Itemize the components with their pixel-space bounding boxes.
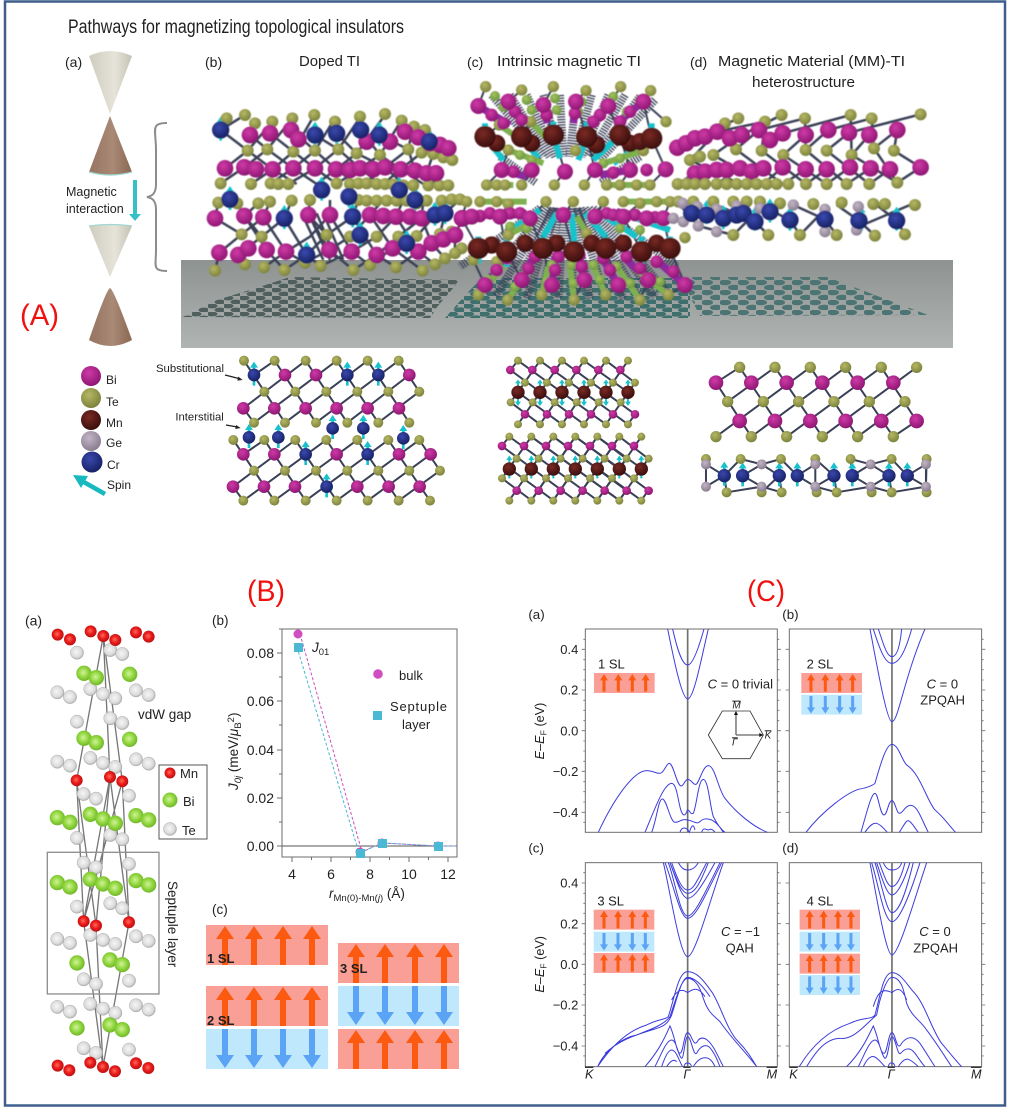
panel B(c): layer stacks: 3 SL [340,961,368,976]
panel C(c): band structure 3 SL: −0.2 [553,998,578,1013]
legend: Mn Bi Te [159,765,207,839]
panel C(d): band structure 4 SL: ZPQAH [913,940,958,955]
crystal: MM-TI heterostructure [668,108,929,242]
panel C(c): band structure 3 SL: 0.2 [560,916,578,931]
panel A(a): Dirac cones: interaction [66,202,124,216]
panel C(d): band structure 4 SL: Γ [888,1068,896,1082]
panel C(a): band structure 1 SL: C = 0 trivial [708,677,773,692]
text: vdW gap: vdW gap [138,707,191,722]
column headings: (c) [467,54,483,70]
panel C(a): band structure 1 SL: Γ [732,737,739,748]
panel B(c): layer stacks [206,902,459,1069]
legend: atoms and spin: Bi [106,373,117,387]
panel A(a): Dirac cones: (a) [65,54,82,70]
panel B(b): exchange coupling chart: (meV/ [226,736,241,776]
panel A(a): Dirac cones [65,51,167,346]
panel C(a): band structure 1 SL: E–E [533,735,547,759]
panel B(b): exchange coupling chart: 2 [226,717,237,722]
legend: atoms and spin [73,366,131,494]
panel B(b): exchange coupling chart [212,613,457,904]
panel C(d): band structure 4 SL: K [789,1068,798,1082]
panel C(a): band structure 1 SL: M [732,701,741,712]
side view: doped TI: Substitutional [156,363,224,375]
panel C(c): band structure 3 SL: 0.4 [560,876,578,891]
panel B(b): exchange coupling chart: 0.04 [247,742,274,758]
panel B(b): exchange coupling chart: B [233,722,244,729]
text: septuple layer: Septuple layer [165,881,180,968]
panel C(b): band structure 2 SL: C = 0 [927,677,958,692]
column headings: heterostructure [752,74,855,91]
panel C(c): band structure 3 SL [528,840,781,1082]
panel B(c): layer stacks: (c) [212,902,228,917]
panel C(c): band structure 3 SL: M [767,1068,778,1082]
panel C(d): band structure 4 SL [782,840,985,1082]
panel B(b): exchange coupling chart: j) [378,893,383,904]
panel C(c): band structure 3 SL: 0.0 [560,957,578,972]
side view: doped TI [156,356,445,506]
side view: intrinsic magnetic TI [498,357,653,505]
legend: atoms and spin: Spin [107,478,131,492]
panel C(a): band structure 1 SL: 0.4 [560,642,578,657]
column headings: Intrinsic magnetic TI [497,53,641,70]
panel B(b): exchange coupling chart: 12 [440,866,456,882]
panel C(a): band structure 1 SL: (eV) [533,703,547,730]
panel C(d): band structure 4 SL: C = 0 [919,924,951,939]
side view: MM-TI heterostructure [701,362,932,497]
panel B(b): exchange coupling chart: Septuple [390,699,447,714]
column headings [205,53,905,91]
column headings: Magnetic Material (MM)-TI [718,53,905,70]
legend: Mn Bi Te: Bi [183,794,195,809]
panel B(b): exchange coupling chart: r [329,886,334,901]
label: section B: (B) [247,575,285,608]
panel C(c): band structure 3 SL: Γ [683,1068,691,1082]
panel C(d): band structure 4 SL: M [971,1068,982,1082]
panel A(a): Dirac cones: Magnetic [66,185,117,199]
panel C(c): band structure 3 SL: (eV) [533,936,547,963]
panel C(c): band structure 3 SL: C = −1 [721,924,760,939]
panel C(a): band structure 1 SL: −0.2 [553,764,578,779]
crystal: doped TI [207,108,471,277]
panel B(b): exchange coupling chart: Mn(0)-Mn( [334,893,379,904]
column headings: (b) [205,54,222,70]
panel C(a): band structure 1 SL [528,607,781,832]
legend: Mn Bi Te: Te [182,823,196,838]
legend: atoms and spin: Mn [106,416,123,430]
panel B(b): exchange coupling chart: J [312,640,319,655]
panel B(b): exchange coupling chart: 10 [401,866,417,882]
title: Pathways for magnetizing topological insulators [68,17,404,38]
panel C(b): band structure 2 SL: ZPQAH [920,693,965,708]
panel B(b): exchange coupling chart: 6 [327,866,335,882]
legend: atoms and spin: Te [106,395,119,409]
floor plane with shadows [181,260,953,348]
panel B(a): MnBi2Te4 crystal structure [25,612,159,1077]
panel B(b): exchange coupling chart: (b) [212,613,228,628]
panel C(b): band structure 2 SL: (b) [782,607,799,622]
legend: Mn Bi Te: Mn [180,766,198,781]
column headings: Doped TI [299,53,360,70]
panel B(b): exchange coupling chart: 0j [233,775,244,783]
panel C(c): band structure 3 SL: QAH [726,940,754,955]
panel B(b): exchange coupling chart: 8 [366,866,374,882]
panel C(a): band structure 1 SL: F [538,730,548,735]
panel C(b): band structure 2 SL: 2 SL [807,657,833,672]
panel C(a): band structure 1 SL: −0.4 [553,805,578,820]
panel B(b): exchange coupling chart: 0.00 [247,838,274,854]
panel C(a): band structure 1 SL: 0.0 [560,723,578,738]
panel C(d): band structure 4 SL: 4 SL [807,893,833,908]
panel B(b): exchange coupling chart: 4 [288,866,296,882]
panel B(b): exchange coupling chart: μ [226,728,241,737]
panel C(c): band structure 3 SL: F [538,963,548,969]
column headings: (d) [690,54,707,70]
panel B(c): layer stacks: 2 SL [207,1013,235,1028]
panel B(b): exchange coupling chart: bulk [399,668,423,683]
panel B(b): exchange coupling chart: J [226,783,241,791]
panel B(a): MnBi2Te4 crystal structure: (a) [25,612,42,628]
crystal: intrinsic magnetic TI [454,81,693,306]
legend: atoms and spin: Ge [106,436,122,450]
panel C(a): band structure 1 SL: 1 SL [598,657,625,672]
panel C(c): band structure 3 SL: K [585,1068,594,1082]
panel B(b): exchange coupling chart: 0.06 [247,693,274,709]
panel B(b): exchange coupling chart: (Å) [383,886,405,901]
panel B(b): exchange coupling chart: ) [226,713,241,717]
panel C(a): band structure 1 SL: (a) [528,607,545,622]
panel B(c): layer stacks: 1 SL [207,951,235,966]
legend: atoms and spin: Cr [107,458,120,472]
panel C(a): band structure 1 SL: K [765,730,773,741]
panel C(b): band structure 2 SL [782,607,985,832]
panel C(a): band structure 1 SL: 0.2 [560,683,578,698]
panel C(c): band structure 3 SL: (c) [528,840,544,855]
panel B(b): exchange coupling chart: 0.02 [247,790,274,806]
panel C(d): band structure 4 SL: (d) [782,840,799,855]
panel B(b): exchange coupling chart: layer [402,717,431,732]
label: section C: (C) [747,575,785,608]
panel C(c): band structure 3 SL: −0.4 [553,1039,578,1054]
panel B(b): exchange coupling chart: 0.08 [247,645,274,661]
panel C(c): band structure 3 SL: E–E [533,969,547,993]
panel C(c): band structure 3 SL: 3 SL [597,893,624,908]
panel B(b): exchange coupling chart: 01 [319,647,329,658]
label: section A: (A) [20,299,59,332]
side view: doped TI: Interstitial [175,412,224,424]
